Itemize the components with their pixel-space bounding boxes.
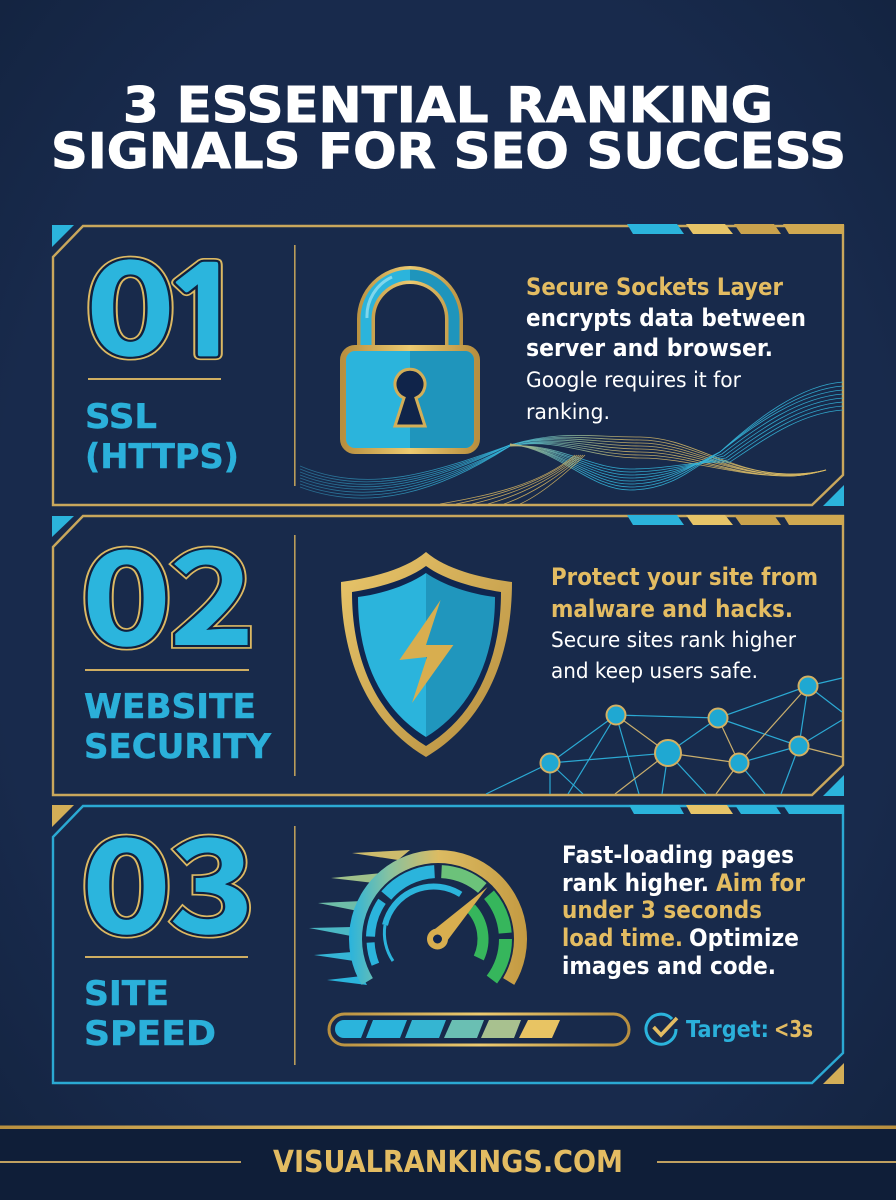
label: SSL (HTTPS) [85, 397, 239, 477]
label: website security [84, 687, 271, 767]
text: SSL description: Google requires it for [526, 368, 741, 393]
text: speed description: Fast-loading pages [562, 841, 794, 869]
wave decoration [300, 382, 843, 504]
panel: website security [52, 495, 844, 796]
number 02 [81, 495, 255, 683]
panel 3 frame [53, 806, 843, 1083]
text: speed description: images and code. [562, 952, 776, 980]
text: speed description: Optimize [689, 924, 799, 952]
text: SSL description: ranking. [526, 400, 610, 425]
number 01: 0 [85, 205, 176, 393]
panel 1 corner accents [52, 224, 844, 506]
title: 3 ESSENTIAL RANKING [123, 77, 773, 134]
number 03: 3 [169, 783, 255, 971]
number 02: 2 [169, 495, 255, 683]
divider [294, 245, 296, 486]
text: security description: Protect your site from [551, 563, 818, 591]
text: target: Target: [686, 1017, 769, 1043]
number 01: 1 [160, 252, 250, 374]
number rule [85, 956, 248, 958]
text: security description: malware and hacks. [551, 595, 793, 623]
footer [0, 1126, 896, 1200]
label: site speed: SITE [84, 974, 169, 1014]
number 01: 0 [85, 205, 176, 393]
number 03: 0 [81, 783, 172, 971]
icon: target check [646, 1014, 677, 1044]
text: security description [551, 563, 818, 684]
text: SSL description: Secure Sockets Layer [526, 273, 783, 301]
text: SSL description: server and browser. [526, 334, 773, 362]
footer side lines [0, 1161, 896, 1163]
text: security description: and keep users safe. [551, 659, 758, 684]
label: SSL (HTTPS): SSL [85, 397, 157, 437]
text: speed description: load time. [562, 924, 683, 952]
label: website security: SECURITY [84, 727, 271, 767]
title: SIGNALS FOR SEO SUCCESS [51, 123, 846, 180]
label: site speed: SPEED [84, 1014, 216, 1054]
divider [294, 826, 296, 1065]
title [51, 77, 846, 180]
panel 2 corner accents [52, 515, 844, 796]
text: security description: Secure sites rank higher [551, 628, 796, 653]
text: SSL description: encrypts data between [526, 304, 806, 332]
text: speed description: under 3 seconds [562, 896, 762, 924]
panel 2 frame [53, 516, 843, 795]
icon: shield [341, 552, 512, 757]
text: target: <3s [774, 1017, 813, 1043]
number 01 [85, 205, 250, 393]
number 02: 0 [81, 495, 172, 683]
divider [294, 535, 296, 776]
label: website security: WEBSITE [84, 687, 256, 727]
number 03: 0 [81, 783, 172, 971]
number 02: 0 [81, 495, 172, 683]
network decoration [486, 676, 842, 794]
icon: speedometer [309, 850, 520, 985]
number 02: 2 [169, 495, 255, 683]
footer gold line [0, 1126, 896, 1129]
number rule [85, 669, 249, 671]
label: SSL (HTTPS): (HTTPS) [85, 437, 239, 477]
text: speed description: Aim for [716, 869, 805, 897]
text: SSL description [526, 273, 806, 425]
number 03: 3 [169, 783, 255, 971]
panel 1 frame [53, 226, 843, 505]
progress bar [329, 1014, 629, 1045]
footer website: VISUALRANKINGS.COM [273, 1145, 623, 1180]
text: speed description: rank higher. [562, 869, 709, 897]
number 03 [81, 783, 255, 971]
panel 3 corner accents [52, 805, 844, 1084]
icon: padlock [343, 275, 477, 451]
number rule [88, 378, 221, 380]
text: speed description [562, 841, 805, 980]
number 01: 1 [160, 252, 250, 374]
footer band [0, 1128, 896, 1200]
panel: SSL [52, 205, 844, 506]
panel: site speed [52, 783, 844, 1084]
label: site speed [84, 974, 216, 1054]
